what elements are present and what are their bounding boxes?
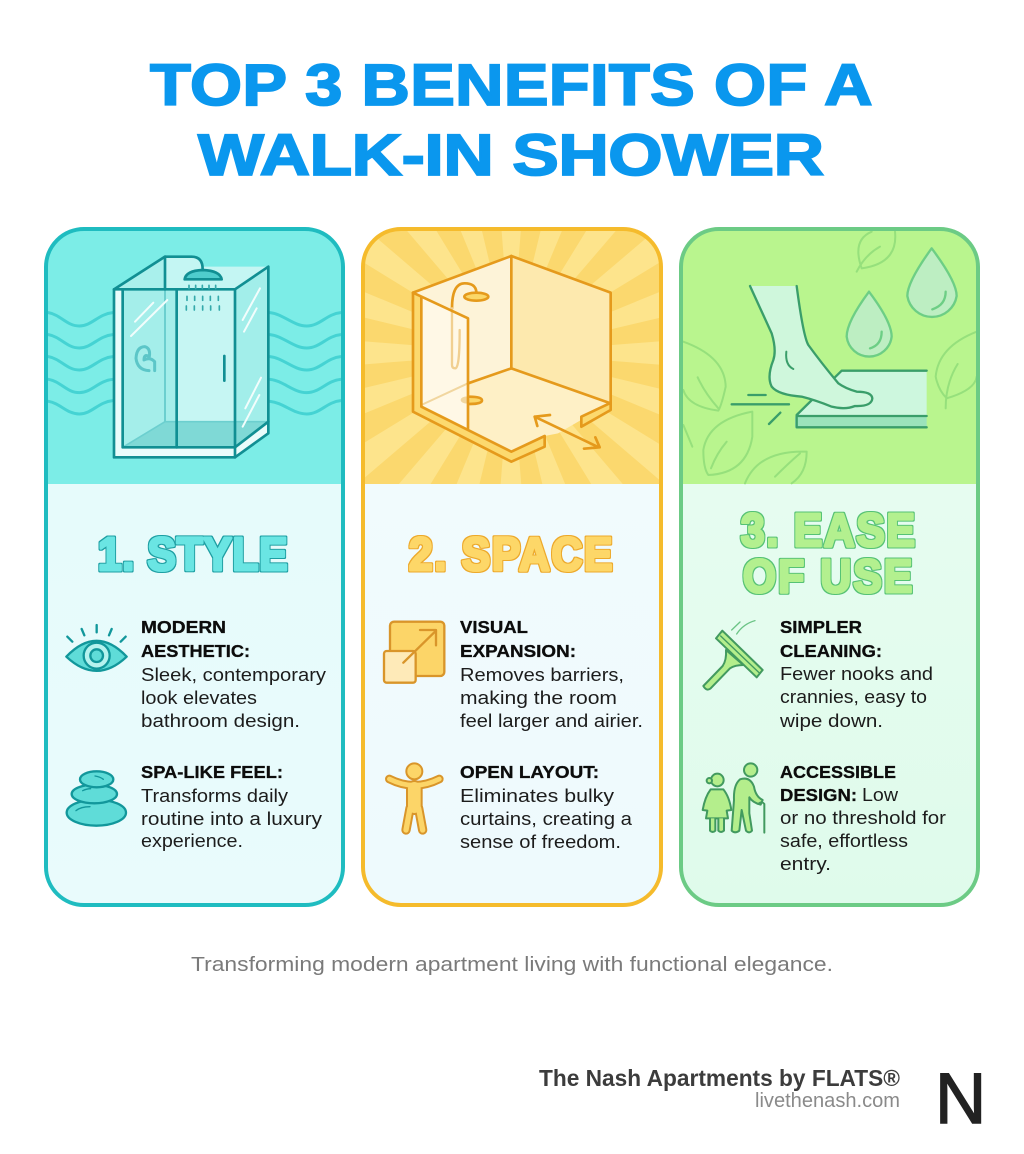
icon: stacked spa stones [67,771,126,826]
text: visual expansion [460,617,643,731]
illustration: glass shower enclosure [48,257,341,457]
text: accessible design: ACCESSIBLE [780,762,896,782]
text: visual expansion: making the room [460,688,617,708]
text: accessible design [780,762,946,874]
text: modern aesthetic: bathroom design. [141,711,300,731]
title: TOP 3 BENEFITS OF A [150,53,872,118]
text: simpler cleaning: CLEANING: [780,641,882,661]
text: accessible design: or no threshold for [780,808,946,828]
title [150,53,872,188]
logo: N: N [935,1060,986,1139]
text: visual expansion: EXPANSION: [460,641,576,661]
text: spa-like feel: routine into a luxury [141,809,322,829]
text: open layout [460,762,633,852]
panel: style [46,229,343,905]
water drops [847,248,957,357]
text: visual expansion: VISUAL [460,617,528,637]
text: accessible design: Low [862,785,899,805]
title: WALK-IN SHOWER [198,123,824,188]
icon: elderly couple [703,763,764,833]
illustration: foot stepping onto flat threshold [732,248,957,427]
text: simpler cleaning: wipe down. [779,711,883,731]
text: open layout: sense of freedom. [460,832,621,852]
heading: 3. Ease of use [741,505,915,602]
text: modern aesthetic: MODERN [141,617,226,637]
text: accessible design: DESIGN: [780,785,857,805]
heading: 3. Ease of use: 3. EASE [741,505,915,556]
text: simpler cleaning [779,617,933,731]
heading: 1. Style: 1. STYLE [98,529,288,580]
icon: squeegee [703,621,763,690]
footer: brand name and URL: livethenash.com [755,1090,900,1112]
text: simpler cleaning: crannies, easy to [780,687,927,707]
text: modern aesthetic: look elevates [141,688,257,708]
text: spa-like feel: SPA-LIKE FEEL: [141,762,283,782]
text: open layout: curtains, creating a [460,809,633,829]
footer: brand name and URL [539,1065,900,1112]
tagline: Transforming modern apartment living with functional elegance. [191,953,833,976]
text: visual expansion: Removes barriers, [460,665,624,685]
illustration: open walk-in room [413,256,611,462]
sunburst background [393,235,629,471]
background leaves [683,232,977,483]
text: simpler cleaning: SIMPLER [780,617,862,637]
footer: brand name and URL: The Nash Apartments by FLATS® [539,1065,900,1091]
text: modern aesthetic [141,617,326,731]
panel: space [363,229,661,905]
icon: expanding squares [384,622,444,683]
text: accessible design: entry. [780,854,831,874]
text: open layout: Eliminates bulky [460,786,614,806]
text: modern aesthetic: Sleek, contemporary [141,665,326,685]
heading: 2. Space: 2. SPACE [409,529,612,580]
text: spa-like feel: Transforms daily [141,786,288,806]
panel: ease of use [681,229,978,905]
heading: 3. Ease of use: OF USE [743,551,912,602]
text: accessible design: safe, effortless [780,831,908,851]
text: simpler cleaning: Fewer nooks and [780,664,933,684]
text: modern aesthetic: AESTHETIC: [141,641,250,661]
text: spa-like feel [141,762,322,851]
text: visual expansion: feel larger and airier. [460,711,643,731]
text: open layout: OPEN LAYOUT: [460,762,599,782]
icon: eye [66,625,127,671]
icon: person with open arms [389,763,439,830]
text: spa-like feel: experience. [141,831,243,851]
